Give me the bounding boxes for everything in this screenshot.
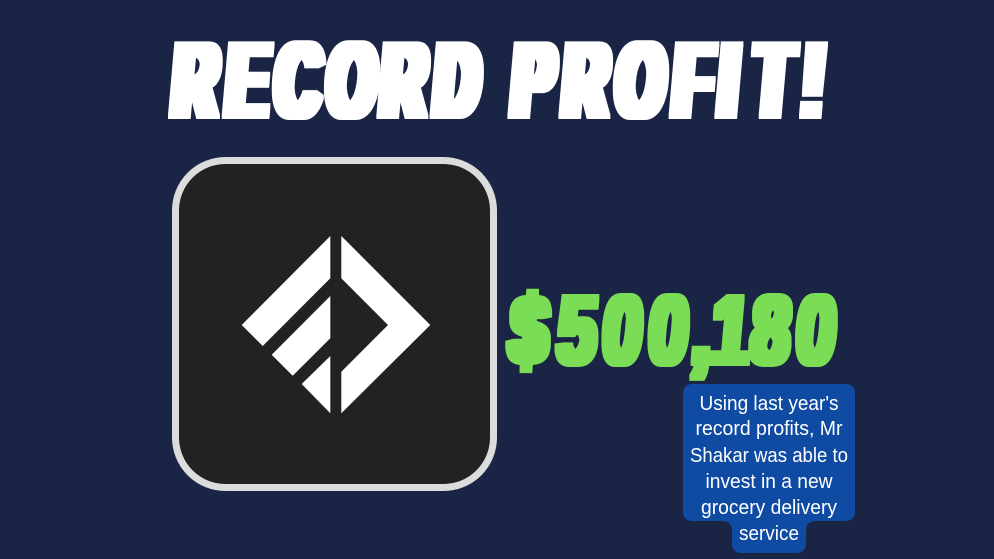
callout text xyxy=(690,393,848,545)
callout text: invest in a new xyxy=(706,471,833,493)
callout: investment note xyxy=(683,384,855,553)
profit amount: $500,180 xyxy=(505,276,840,384)
callout text: record profits, Mr xyxy=(696,418,843,440)
panel: company logo xyxy=(176,160,494,488)
callout text: grocery delivery xyxy=(701,497,837,519)
title: RECORD PROFIT! xyxy=(169,21,829,140)
callout text: Using last year's xyxy=(700,393,838,415)
icon: diamond logo mark xyxy=(242,236,430,413)
callout text: service xyxy=(739,523,799,545)
callout text: Shakar was able to xyxy=(690,445,848,467)
